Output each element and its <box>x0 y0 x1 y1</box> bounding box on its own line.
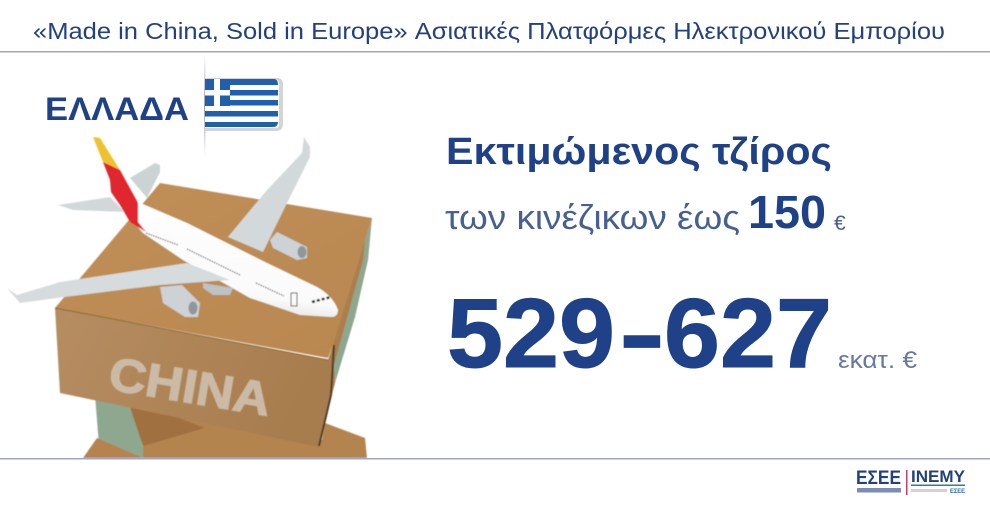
logo: ΕΣΕΕ: ΕΣΕΕ <box>856 468 901 489</box>
far wing <box>228 137 310 252</box>
belly fairing <box>203 283 233 295</box>
logos <box>856 468 965 495</box>
subheading text: των κινέζικων έως <box>445 199 740 237</box>
windows <box>146 233 284 296</box>
far tailplane <box>130 163 160 198</box>
near tailplane <box>58 197 125 212</box>
upper cardboard box <box>55 183 372 447</box>
cockpit windows <box>312 297 331 302</box>
airplane <box>7 137 338 317</box>
far engine <box>270 232 307 260</box>
main figure: 529-627 <box>447 278 832 388</box>
unit: euro: € <box>834 212 846 235</box>
tail fin: red <box>103 162 146 232</box>
main figure: 529-627: 529 <box>447 278 615 388</box>
bottom divider line <box>0 458 990 460</box>
lower cardboard box <box>83 395 367 458</box>
value: 150: 150 <box>748 186 826 238</box>
illustration: cardboard boxes with airplane <box>7 137 372 458</box>
main figure: 529-627: - <box>619 278 665 388</box>
logo: ΙΝΕΜΥ: INEMY <box>911 468 965 486</box>
logo: ΙΝΕΜΥ: ΕΣΕΕ <box>950 489 965 495</box>
logo divider <box>906 470 908 495</box>
vertical separator beside flag <box>204 55 206 157</box>
icon: Greek flag <box>205 78 283 131</box>
main figure: 529-627: 627 <box>664 278 832 388</box>
unit: million euro: εκατ. € <box>838 347 918 374</box>
top divider line <box>0 51 990 52</box>
title: «Made in China, Sold in Europe» Ασιατικές Πλατφόρμες Ηλεκτρονικού Εμπορίου <box>33 18 945 44</box>
fuselage <box>123 202 338 317</box>
near wing <box>7 263 230 303</box>
country label: ΕΛΛΑΔΑ: ΕΛΛΑΔΑ <box>45 91 189 127</box>
tail fin: yellow <box>93 137 120 170</box>
heading: Εκτιμώμενος τζίρος: Εκτιμώμενος τζίρος <box>446 131 832 173</box>
logo: ΙΝΕΜΥ <box>911 468 965 495</box>
box label: CHINA: CHINA <box>105 347 275 426</box>
door <box>291 293 297 306</box>
near engine <box>160 285 200 317</box>
